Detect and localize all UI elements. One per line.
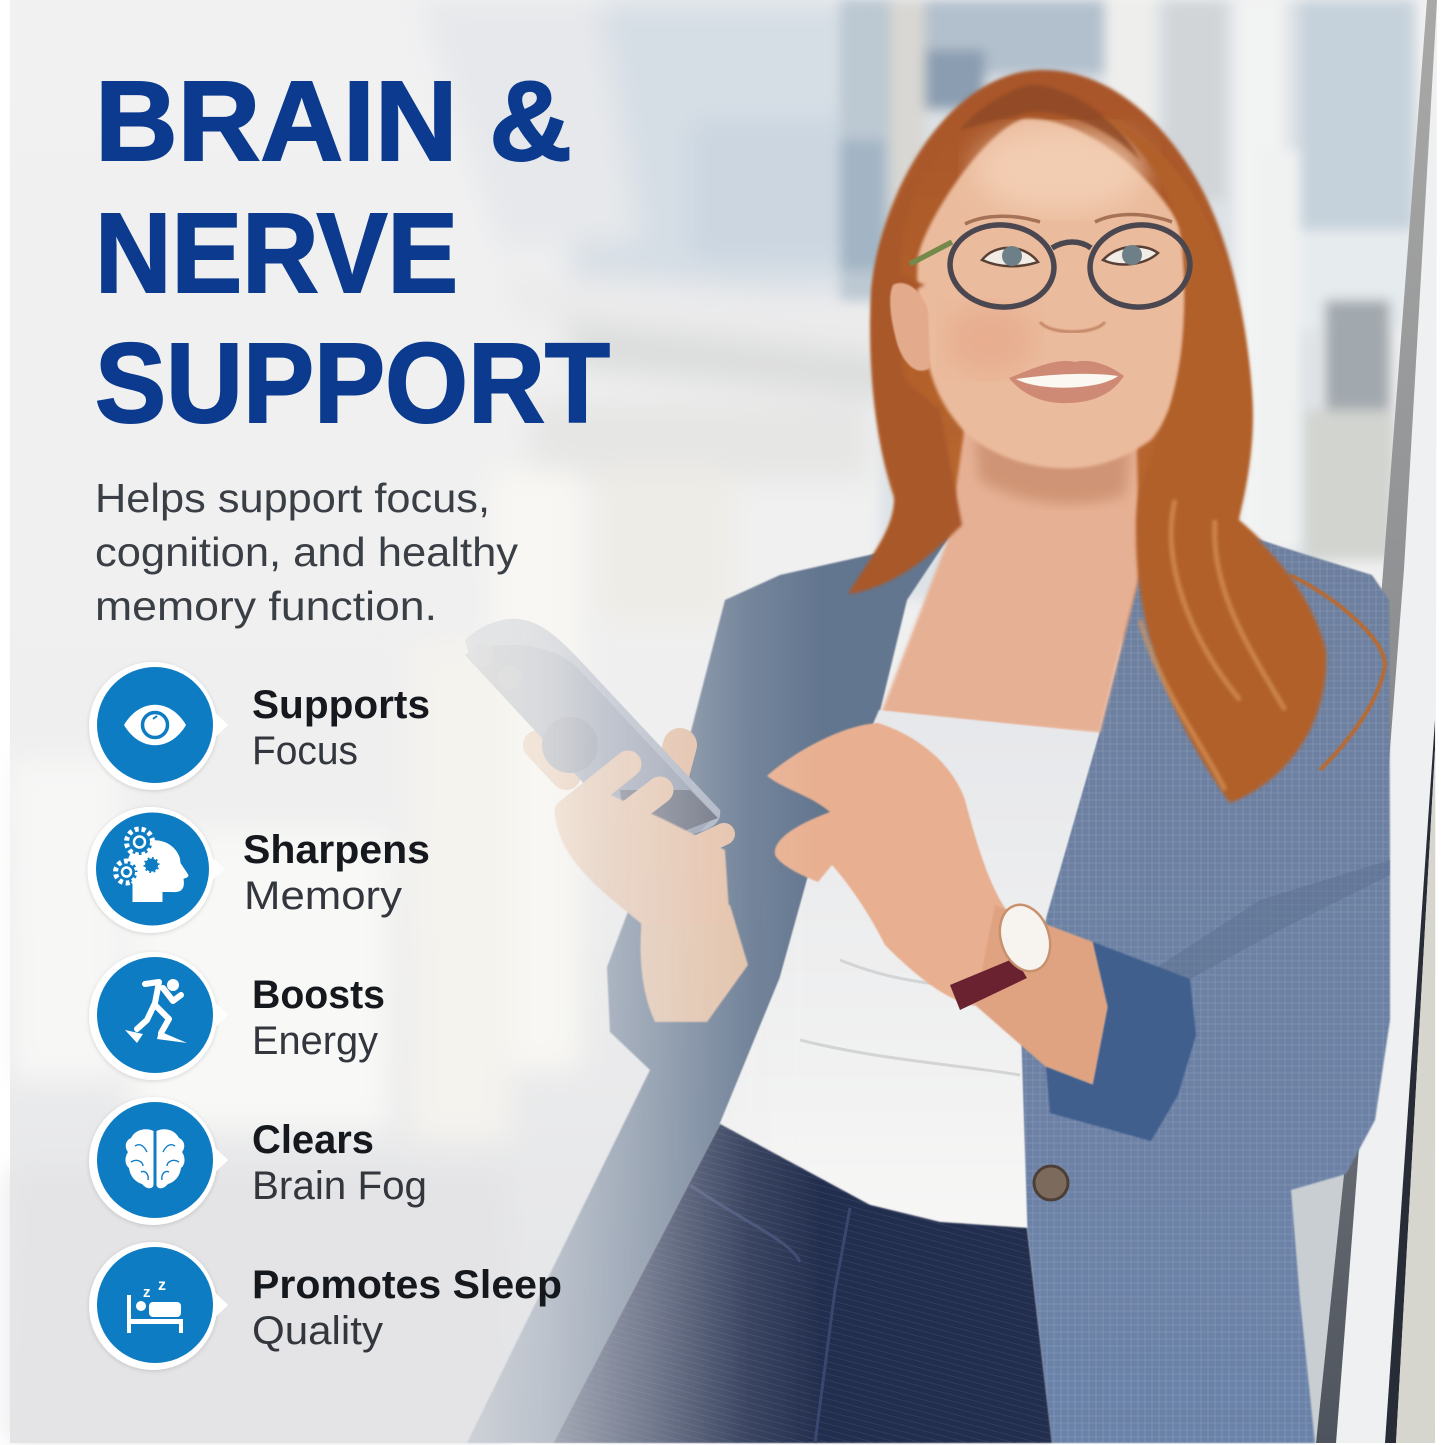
left forearm (641, 905, 748, 1022)
icon: person sleeping in bed: z (158, 1277, 166, 1294)
hair strand right of the face (1100, 115, 1326, 803)
text: supports focus: Focus (252, 729, 358, 773)
navy trousers (553, 1124, 1052, 1443)
text: promotes sleep quality (252, 1263, 562, 1353)
benefit: sharpens memory (88, 807, 430, 933)
white tank top (720, 710, 1099, 1228)
text: clears brain fog: Brain Fog (252, 1164, 427, 1208)
text: supports focus: Supports (252, 683, 430, 727)
door frame and white panel at right edge (1285, 0, 1437, 1443)
hair strand over shoulder (1290, 575, 1385, 770)
right hand (767, 723, 1005, 1006)
face (917, 119, 1185, 468)
icon: runner (89, 952, 228, 1080)
hair part over forehead (960, 85, 1140, 160)
tank top folds (800, 960, 1020, 1075)
hair highlights (1140, 500, 1285, 790)
right jacket body (1021, 530, 1390, 1443)
text: supports focus (252, 683, 430, 773)
left jacket body and lapel (467, 537, 949, 1443)
ear (890, 283, 930, 371)
hair back (868, 67, 1265, 648)
text: boosts energy (252, 973, 385, 1063)
title: SUPPORT (95, 320, 610, 446)
cheek blush (952, 310, 1028, 370)
left hand holding phone (555, 764, 730, 925)
text: clears brain fog: Clears (252, 1118, 374, 1162)
benefit: boosts energy (89, 952, 385, 1080)
title: NERVE (95, 190, 458, 316)
jacket sleeve shading (1158, 860, 1390, 978)
text: sharpens memory: Sharpens (243, 828, 430, 872)
text: clears brain fog (252, 1118, 427, 1208)
icon: brain (89, 1097, 228, 1225)
subtitle text block: cognition, and healthy (95, 529, 519, 575)
icon: person sleeping in bed: z (143, 1284, 150, 1301)
woman photo illustration (465, 70, 1390, 1443)
neck and chest skin (880, 425, 1140, 733)
mouth (1009, 361, 1124, 403)
wristwatch (950, 904, 1052, 1010)
text: boosts energy: Energy (252, 1019, 378, 1063)
benefit: clears brain fog (89, 1097, 427, 1225)
benefit: supports focus (89, 662, 430, 790)
eyebrows (965, 214, 1172, 224)
phone back fingers (538, 745, 680, 790)
text: sharpens memory: Memory (244, 874, 402, 918)
forearm with watch side (975, 905, 1108, 1085)
icon: eye (89, 662, 228, 790)
benefit: promotes sleep quality (89, 1242, 562, 1370)
jacket fabric weave (1021, 530, 1390, 1443)
eyes (982, 245, 1158, 266)
rolled sleeve cuff (1046, 942, 1196, 1141)
face highlight (975, 128, 1145, 212)
nose (1040, 322, 1105, 332)
title: BRAIN & (95, 58, 572, 184)
text: sharpens memory (243, 828, 430, 918)
text: promotes sleep quality: Quality (252, 1309, 383, 1353)
subtitle text block: Helps support focus, (95, 475, 490, 521)
hair on the left of the face (846, 214, 964, 596)
phone (465, 619, 720, 844)
text: boosts energy: Boosts (252, 973, 385, 1017)
icon: head with gears (88, 807, 224, 933)
glasses (910, 221, 1193, 311)
trouser fly seam (690, 1185, 850, 1443)
jacket button (1034, 1166, 1068, 1200)
subtitle text block (95, 475, 519, 629)
icon: person sleeping in bed (89, 1242, 228, 1370)
background: window frames at upper right (840, 0, 1415, 600)
title (95, 58, 610, 446)
subtitle text block: memory function. (95, 583, 437, 629)
trouser twill texture (553, 1124, 1052, 1443)
text: promotes sleep quality: Promotes Sleep (252, 1263, 562, 1307)
neck shadow (975, 440, 1130, 503)
